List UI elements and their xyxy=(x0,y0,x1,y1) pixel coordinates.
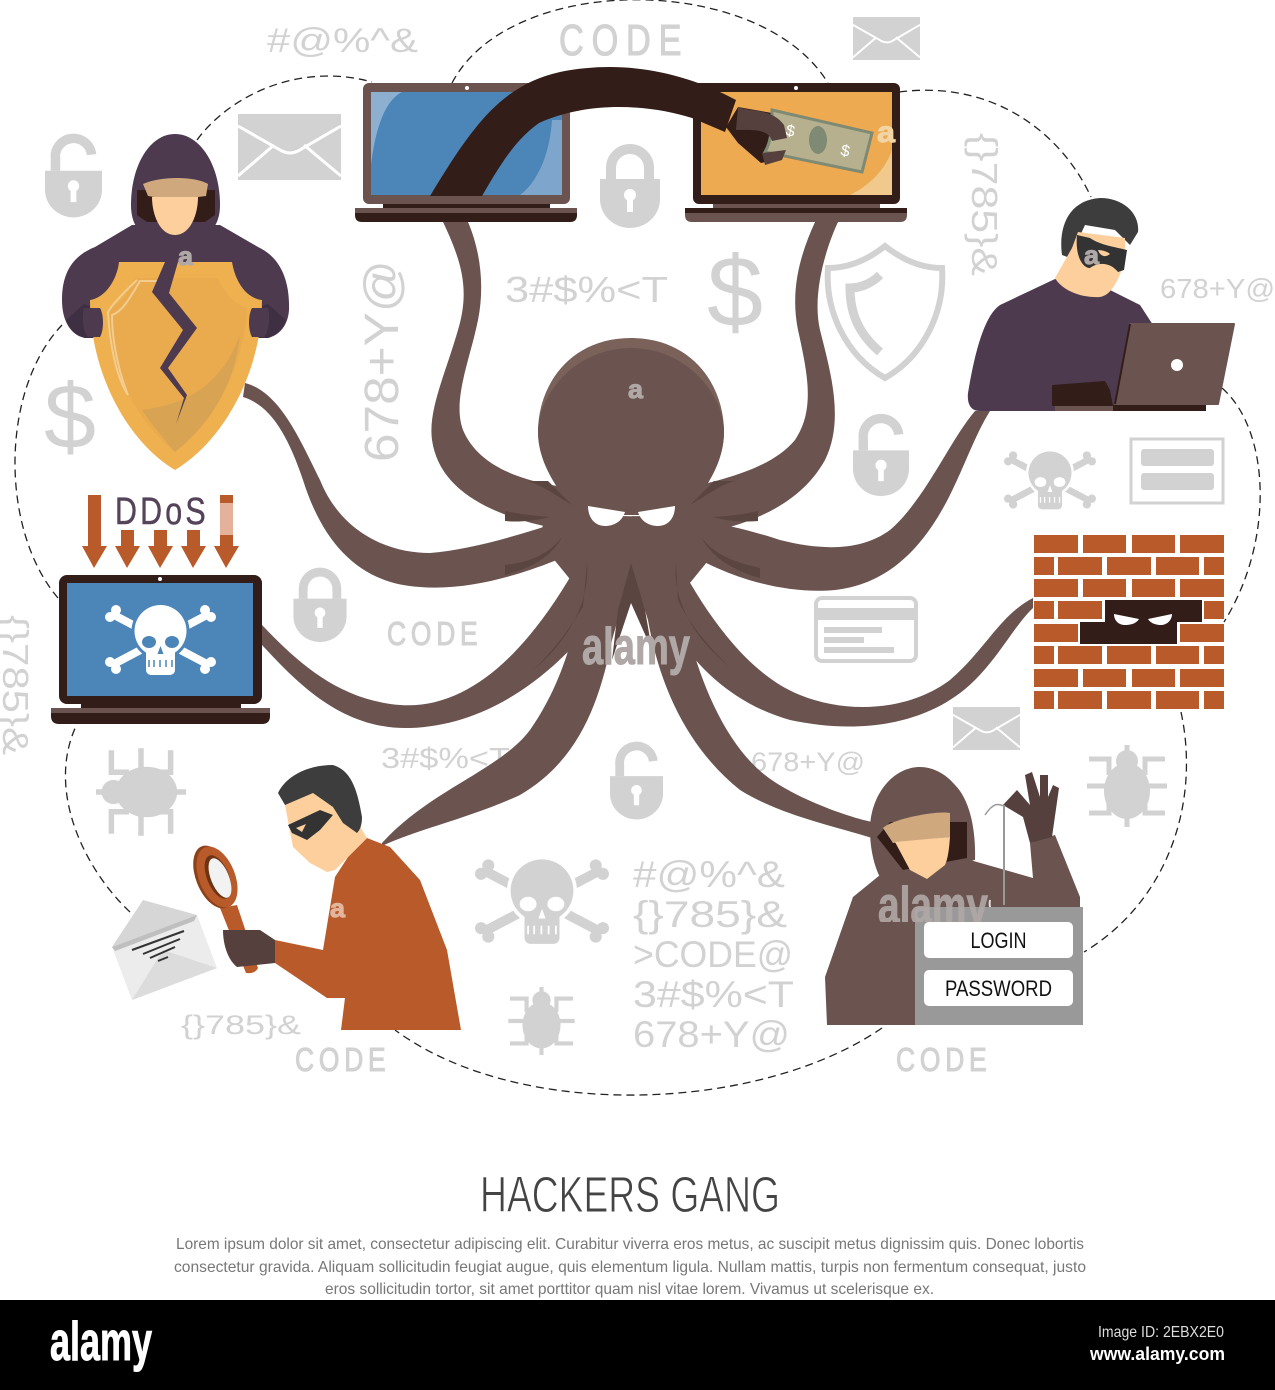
grey code text: far right: 678+Y@ xyxy=(1160,273,1275,304)
arm and hand with banknote xyxy=(430,67,872,196)
grey code text: symbols lower right: 678+Y@ xyxy=(751,747,865,777)
icon: dollar centre: $ xyxy=(707,236,763,348)
title: HACKERS GANG xyxy=(480,1166,780,1223)
watermark xyxy=(178,116,1100,935)
description text: Lorem ipsum dolor sit amet, consectetur adipiscing elit. Curabitur viverra eros metus, ac suscipit metus dignissim quis. Donec lobortis xyxy=(176,1236,1084,1253)
description text xyxy=(174,1236,1086,1298)
icon: envelope upper left xyxy=(238,114,341,180)
icon: grey shield xyxy=(828,246,942,378)
arm and hand with banknote: $ xyxy=(784,122,796,141)
icon: skull lower centre xyxy=(475,856,609,945)
watermark: alamy xyxy=(878,877,988,935)
footer bar xyxy=(0,1300,1275,1390)
watermark: a xyxy=(877,116,895,149)
icon: login form xyxy=(1131,439,1223,503)
watermark: a xyxy=(628,374,644,404)
watermark: a xyxy=(178,241,194,271)
icon: skull right xyxy=(1004,449,1096,510)
footer bar: alamy xyxy=(50,1310,152,1372)
head xyxy=(538,338,724,510)
icon: lock centre top xyxy=(600,149,660,228)
icon: dollar left: $ xyxy=(44,366,96,468)
icon: envelope top right xyxy=(853,17,920,60)
grey code text: rotated right: {}785}& xyxy=(964,133,1005,276)
grey code text: centre top: 3#$%<T xyxy=(505,269,668,310)
hooded hacker with login panel xyxy=(825,767,1083,1025)
grey code text: CODE left: CODE xyxy=(387,616,482,653)
icon: envelope lower right xyxy=(953,707,1020,750)
grey code text block: 3#$%<T xyxy=(633,974,794,1015)
tentacles xyxy=(243,222,1033,846)
icon: lock left xyxy=(293,572,347,642)
arm and hand with banknote: $ xyxy=(839,142,851,161)
open envelope xyxy=(112,900,217,1000)
grey code text: symbols lower left: 3#$%<T xyxy=(381,743,510,775)
DDoS label: DDoS xyxy=(115,491,209,533)
grey code text block: {}785}& xyxy=(633,894,787,935)
icon: bug lower centre xyxy=(508,987,575,1055)
laptop blue with arm xyxy=(355,83,577,222)
icon: bug left xyxy=(96,748,186,836)
hand and hook xyxy=(1003,772,1059,843)
thief with laptop xyxy=(968,198,1234,411)
watermark: a xyxy=(330,893,346,923)
description text: eros sollicitudin tortor, sit amet porttitor quam nisl vitae lorem. Vivamus ut scelerisque ex. xyxy=(325,1281,934,1298)
eyes xyxy=(588,506,625,526)
hooded hacker with login panel: LOGIN xyxy=(970,928,1026,953)
octopus xyxy=(243,222,1033,846)
icon: open lock right xyxy=(853,419,909,496)
footer bar: Image ID: 2EBX2E0 xyxy=(1098,1324,1224,1341)
description text: consectetur gravida. Aliquam sollicitudin feugiat augue, quis elementum ligula. Nullam mattis, turpis non fermentum consequat, justo xyxy=(174,1259,1086,1276)
grey code text: top hash symbols: #@%^& xyxy=(267,22,418,60)
DDoS arrows xyxy=(82,495,239,568)
dashed cloud outline xyxy=(15,0,1260,1095)
laptop orange with money xyxy=(685,83,907,222)
brick wall with eyes xyxy=(1034,535,1224,709)
grey code text: top CODE: CODE xyxy=(559,16,689,65)
tentacle shadows xyxy=(505,481,760,670)
grey code text block: >CODE@ xyxy=(633,934,793,975)
watermark: a xyxy=(1084,240,1100,270)
grey code text: bottom left: {}785}& xyxy=(181,1010,301,1040)
icon: open lock upper left xyxy=(45,138,102,217)
footer bar: www.alamy.com xyxy=(1089,1344,1225,1364)
grey code text block xyxy=(633,854,794,1055)
icon: open lock lower centre xyxy=(610,746,663,819)
grey code text: CODE bottom right: CODE xyxy=(896,1042,991,1079)
grey code text block: 678+Y@ xyxy=(633,1014,790,1055)
icon: bug right xyxy=(1087,745,1167,827)
thief with magnifying glass xyxy=(185,765,461,1030)
icon: card xyxy=(816,598,916,661)
grey code text: rotated left: 678+Y@ xyxy=(356,260,409,462)
watermark: alamy xyxy=(582,618,690,676)
grey code text block: #@%^& xyxy=(633,854,785,895)
login panel xyxy=(915,907,1083,1025)
hooded hacker with login panel: PASSWORD xyxy=(945,976,1052,1001)
cracked shield xyxy=(90,262,262,470)
body xyxy=(538,490,725,600)
hacker holding cracked shield xyxy=(62,134,289,470)
grey code text: CODE bottom left: CODE xyxy=(295,1042,390,1079)
laptop with skull xyxy=(51,575,270,724)
